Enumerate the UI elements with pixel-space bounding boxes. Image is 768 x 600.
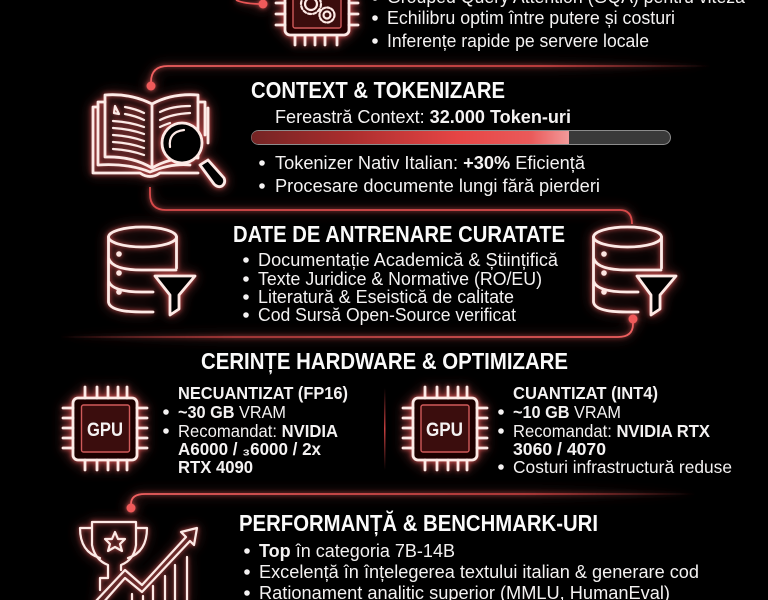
text: performance bullets: Excelență în înțelegerea textului italian & generare cod [259,562,699,582]
heading: training data: DATE DE ANTRENARE CURATATE [233,221,565,247]
text: architecture bullets: Echilibru optim între putere și costuri [387,8,675,28]
connector: performance [126,494,695,512]
icon: trophy with growth arrow [80,522,197,600]
text: performance bullets [244,541,699,600]
icon: database with funnel, left [108,227,195,315]
heading: hardware: CERINȚE HARDWARE & OPTIMIZARE [201,348,568,374]
heading: context: CONTEXT & TOKENIZARE [251,77,505,103]
icon: GPU chip, unquantized [63,387,147,470]
text: unquantized specs: RTX 4090 [178,457,253,477]
text: quantized specs: 3060 / 4070 [513,439,606,459]
text: training data bullets [243,250,559,325]
icon: chip with gears [276,0,358,45]
text: training data bullets: Cod Sursă Open-Source verificat [258,305,516,325]
text: quantized specs [498,383,732,477]
progress bar: context window [252,130,670,144]
connector: context to data [150,187,632,224]
connector: top [236,0,268,8]
text: training data bullets: Literatură & Eseistică de calitate [258,287,514,307]
text: tokenizer bullets: Procesare documente lungi fără pierderi [275,176,600,196]
text: quantized specs: Recomandat: NVIDIA RTX [513,421,710,441]
panel: model architecture (cropped) [276,0,746,51]
heading: performance: PERFORMANȚĂ & BENCHMARK-URI [239,509,598,536]
text: quantized specs: CUANTIZAT (INT4) [513,383,658,403]
text: unquantized specs: NECUANTIZAT (FP16) [178,383,348,403]
connector: context top [146,66,710,90]
panel: curated training data [108,221,676,325]
text: performance bullets: Top în categoria 7B-14B [259,541,455,561]
text: unquantized specs: Recomandat: NVIDIA [178,421,338,441]
icon: GPU chip, unquantized: GPU [87,419,123,441]
icon: open book with magnifier [93,95,225,187]
connector: data to hardware [60,314,638,337]
text: quantized specs: Costuri infrastructură reduse [513,457,732,477]
text: tokenizer bullets: Tokenizer Nativ Italian: +30% Eficiență [275,153,586,173]
text: training data bullets: Documentație Academică & Științifică [258,250,559,270]
text: context window: Fereastră Context: 32.000 Token-uri [275,107,571,127]
icon: GPU chip, quantized: GPU [426,419,463,441]
text: architecture bullets [372,0,746,51]
text: unquantized specs: A6000 / ₃6000 / 2x [178,439,321,459]
panel: context and tokenization [93,77,670,196]
text: unquantized specs [163,383,348,477]
text: architecture bullets: Inferențe rapide pe servere locale [387,31,649,51]
text: unquantized specs: ~30 GB VRAM [178,402,286,422]
text: training data bullets: Texte Juridice & Normative (RO/EU) [258,269,542,289]
icon: database with funnel, right [594,227,676,315]
panel: hardware requirements [63,348,732,477]
panel: performance and benchmarks [80,509,699,600]
text: quantized specs: ~10 GB VRAM [513,402,621,422]
text: tokenizer bullets [259,153,600,196]
icon: GPU chip, quantized [403,387,487,470]
